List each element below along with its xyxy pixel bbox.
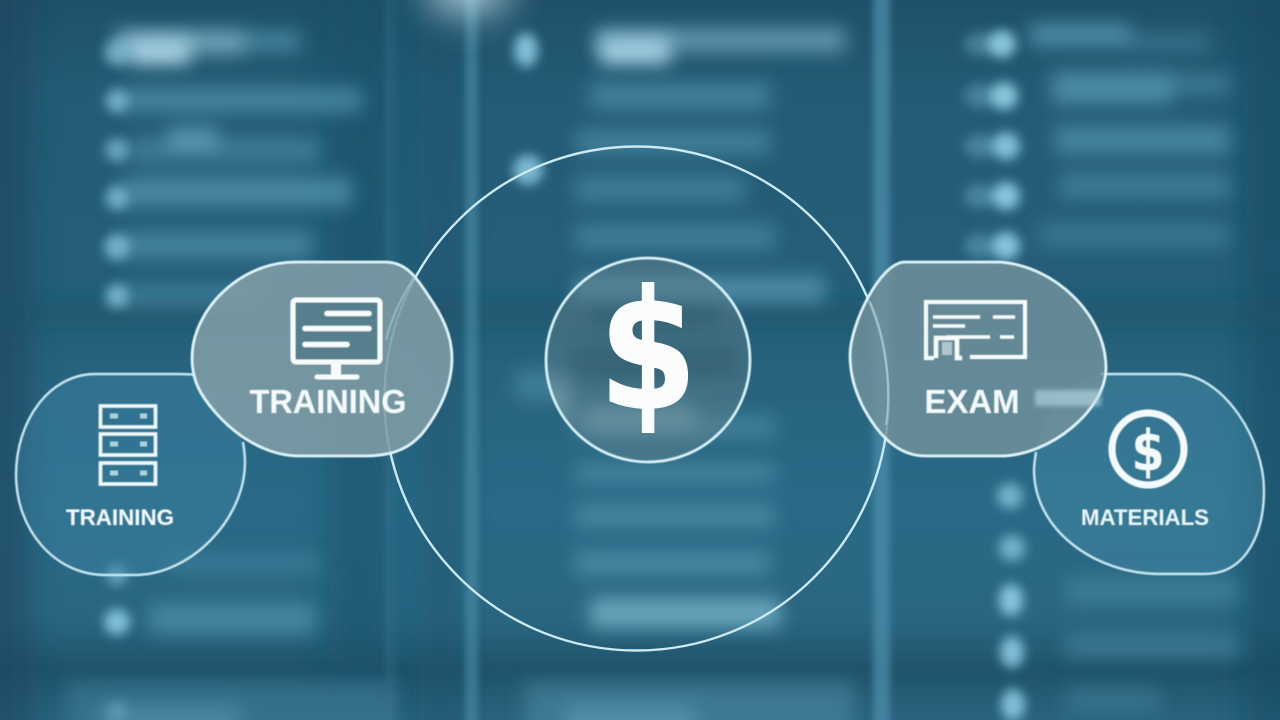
panel: training small card xyxy=(16,374,245,575)
icon: dollar coin xyxy=(1112,413,1184,485)
label: materials: MATERIALS xyxy=(1081,505,1209,530)
panel: training main card xyxy=(192,262,452,456)
middle bright patch xyxy=(600,38,670,64)
label: training: TRAINING xyxy=(250,383,406,420)
bottom panels xyxy=(68,682,854,720)
large outline circle xyxy=(384,146,888,650)
label: exam: EXAM xyxy=(924,383,1020,420)
icon: monitor xyxy=(293,300,380,377)
glowing row dots xyxy=(104,30,1025,720)
icon: dollar coin: $ xyxy=(1131,419,1165,484)
panel: exam card xyxy=(850,262,1106,456)
middle column rows xyxy=(515,28,845,628)
right column rows xyxy=(1030,24,1240,712)
label: training: TRAINING xyxy=(66,505,174,530)
panel: central dollar circle xyxy=(540,256,750,462)
icon: server stack xyxy=(100,406,156,484)
left bright patch xyxy=(128,40,190,64)
icon: exam form xyxy=(926,302,1025,358)
top glow xyxy=(426,0,510,14)
light band seen through the glass xyxy=(1035,390,1101,406)
circle seen through the glass xyxy=(870,302,888,425)
icon: dollar sign: $ xyxy=(599,256,697,448)
circle seen through the glass xyxy=(386,272,418,340)
panel: materials card xyxy=(1034,374,1264,574)
left column rows xyxy=(115,30,362,634)
